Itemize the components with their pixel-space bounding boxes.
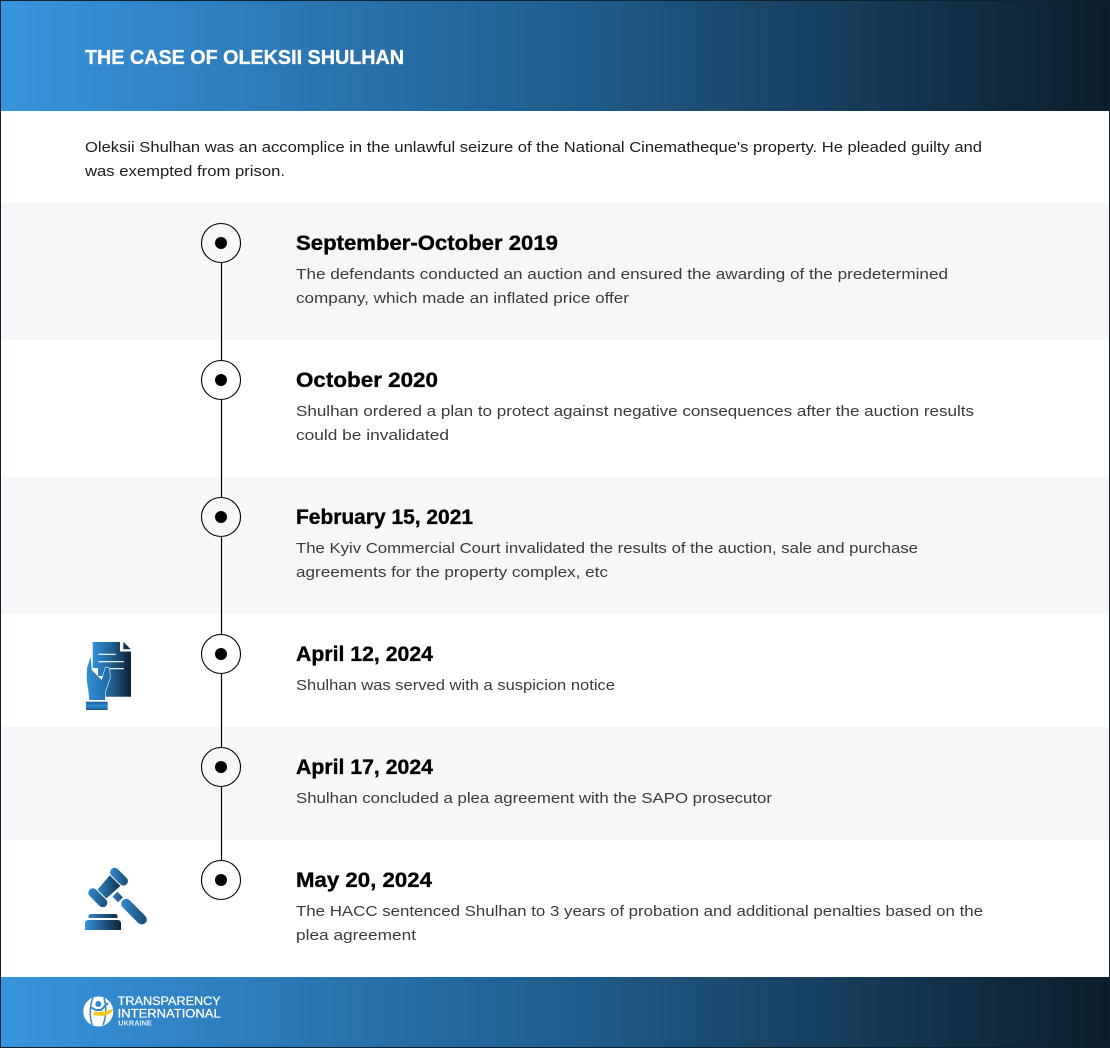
event: September-October 2019 (296, 232, 948, 307)
intro text: was exempted from prison. (84, 163, 285, 180)
event: April 12, 2024: Shulhan was served with a suspicion notice (296, 677, 615, 694)
header band (0, 0, 1110, 111)
timeline marker 5 (202, 748, 240, 786)
event: September-October 2019: company, which made an inflated price offer (296, 290, 629, 307)
icon: hand holding document (86, 642, 131, 710)
event: September-October 2019: September-October 2019 (296, 232, 558, 255)
row band: February 15, 2021 (0, 477, 1110, 614)
event: April 12, 2024: April 12, 2024 (296, 643, 433, 666)
timeline marker 4 (202, 634, 240, 674)
event: April 17, 2024: Shulhan concluded a plea agreement with the SAPO prosecutor (296, 790, 772, 807)
event: October 2020: could be invalidated (296, 427, 449, 444)
event: February 15, 2021: February 15, 2021 (296, 506, 473, 529)
event: October 2020 (296, 369, 974, 444)
event: October 2020: Shulhan ordered a plan to protect against negative consequences after the auction results (296, 403, 974, 420)
row band: September-October 2019 (0, 203, 1110, 340)
footer logo: UKRAINE (118, 1021, 152, 1028)
timeline line (220, 243, 222, 880)
event: May 20, 2024: The HACC sentenced Shulhan to 3 years of probation and additional penalties based on the (296, 903, 983, 920)
event: April 17, 2024 (296, 756, 772, 807)
footer logo: TRANSPARENCY (118, 994, 221, 1008)
event: February 15, 2021: agreements for the property complex, etc (296, 564, 609, 581)
title: THE CASE OF OLEKSII SHULHAN (85, 47, 404, 69)
event: October 2020: October 2020 (296, 369, 438, 392)
event: April 12, 2024 (296, 643, 615, 694)
event: May 20, 2024: plea agreement (296, 927, 417, 944)
event: February 15, 2021: The Kyiv Commercial Court invalidated the results of the auction, sale and purchase (296, 540, 918, 557)
event: May 20, 2024 (296, 869, 983, 944)
timeline marker 6 (202, 860, 240, 900)
timeline marker 2 (202, 360, 240, 400)
footer band (0, 977, 1110, 1048)
timeline marker 1 (202, 224, 240, 262)
event: April 17, 2024: April 17, 2024 (296, 756, 433, 779)
intro text (84, 139, 982, 180)
event: September-October 2019: The defendants conducted an auction and ensured the awarding of the predetermined (296, 266, 948, 283)
event: February 15, 2021 (296, 506, 918, 581)
icon: gavel (85, 872, 142, 930)
event: May 20, 2024: May 20, 2024 (296, 869, 432, 892)
row band: April 17, 2024 (0, 727, 1110, 840)
footer logo (83, 994, 221, 1028)
footer logo: INTERNATIONAL (118, 1006, 221, 1020)
timeline marker 3 (202, 498, 240, 536)
intro text: Oleksii Shulhan was an accomplice in the unlawful seizure of the National Cinematheque's property. He pleaded guilty and (85, 139, 982, 156)
